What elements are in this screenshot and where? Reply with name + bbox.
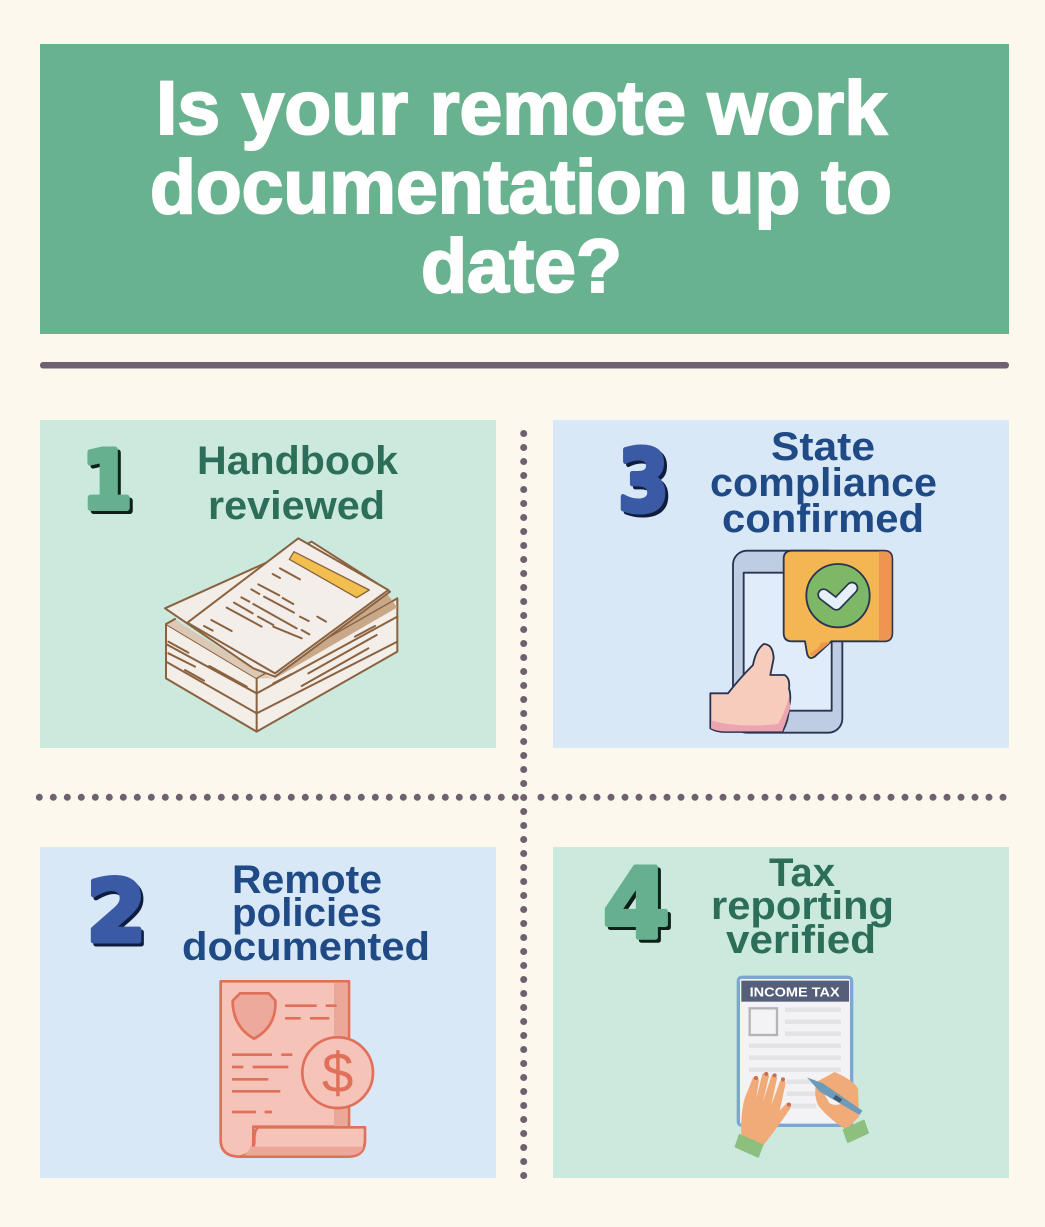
number 2: 2	[89, 865, 149, 965]
number 1: 1	[85, 437, 135, 530]
heading: Tax reporting verified	[711, 851, 894, 962]
heading: Remote policies documented: documented	[182, 925, 430, 969]
number 1: 1	[82, 434, 132, 527]
title banner	[40, 44, 1009, 334]
title: documentation up to	[150, 145, 892, 230]
heading: Remote policies documented: policies	[232, 891, 382, 935]
icon: policy document with dollar	[221, 981, 373, 1157]
heading: Tax reporting verified: Tax	[769, 851, 835, 895]
icon: income tax form with hands: INCOME TAX	[750, 985, 840, 999]
heading: State compliance confirmed: compliance	[710, 461, 937, 505]
heading: Tax reporting verified: reporting	[711, 884, 894, 928]
title	[150, 66, 892, 309]
icon: policy document with dollar: $	[322, 1043, 353, 1106]
heading: State compliance confirmed: State	[771, 425, 875, 469]
heading: State compliance confirmed: confirmed	[722, 497, 924, 541]
panel 3: state compliance confirmed	[553, 420, 1009, 748]
heading: Remote policies documented: Remote	[232, 858, 382, 902]
title: Is your remote work	[156, 66, 888, 151]
number 4: 4	[603, 848, 670, 960]
heading: Handbook reviewed	[197, 439, 399, 528]
dotted separator lines	[39, 434, 1004, 1176]
number 4: 4	[606, 852, 673, 964]
panel 2: remote policies documented	[40, 847, 496, 1178]
heading: Tax reporting verified: verified	[726, 918, 876, 962]
heading: Handbook reviewed: Handbook	[197, 439, 399, 483]
number 2: 2	[86, 862, 146, 962]
panel 4: tax reporting verified	[553, 847, 1009, 1178]
title: date?	[421, 224, 622, 309]
icon: phone with thumbs up and check bubble	[710, 551, 892, 733]
icon: paper stack	[165, 538, 397, 732]
heading: Handbook reviewed: reviewed	[208, 484, 385, 528]
number 3: 3	[621, 435, 672, 535]
icon: income tax form with hands	[736, 977, 868, 1157]
number 3: 3	[618, 432, 669, 532]
heading: Remote policies documented	[182, 858, 430, 969]
panel 1: handbook reviewed	[40, 420, 496, 748]
heading: State compliance confirmed	[710, 425, 937, 541]
